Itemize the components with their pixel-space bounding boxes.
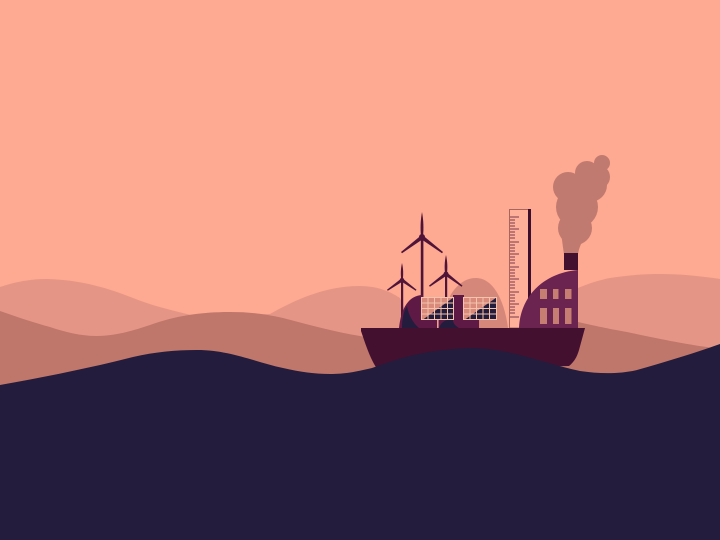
wind turbine: large — [401, 212, 443, 297]
light support post — [437, 320, 439, 328]
small magenta dome — [399, 295, 423, 328]
thermometer ruler — [510, 209, 531, 328]
back hills — [0, 274, 720, 400]
ship hull — [361, 328, 585, 370]
windows — [540, 289, 572, 324]
navy dome shadow — [402, 306, 419, 328]
chimney — [564, 253, 578, 270]
middle hills — [0, 311, 720, 420]
ship and equipment — [361, 155, 610, 370]
navy dome shadow center — [439, 320, 459, 328]
solar panel: left — [421, 297, 454, 320]
solar panel: right — [463, 297, 497, 320]
wind turbine: right — [429, 255, 462, 299]
smoke plume — [553, 155, 610, 254]
sea — [0, 344, 720, 540]
factory building — [519, 253, 578, 328]
central post — [453, 295, 464, 328]
pink dome behind panels — [450, 278, 508, 328]
base between panels — [421, 320, 479, 328]
wind turbine: left — [387, 263, 416, 328]
